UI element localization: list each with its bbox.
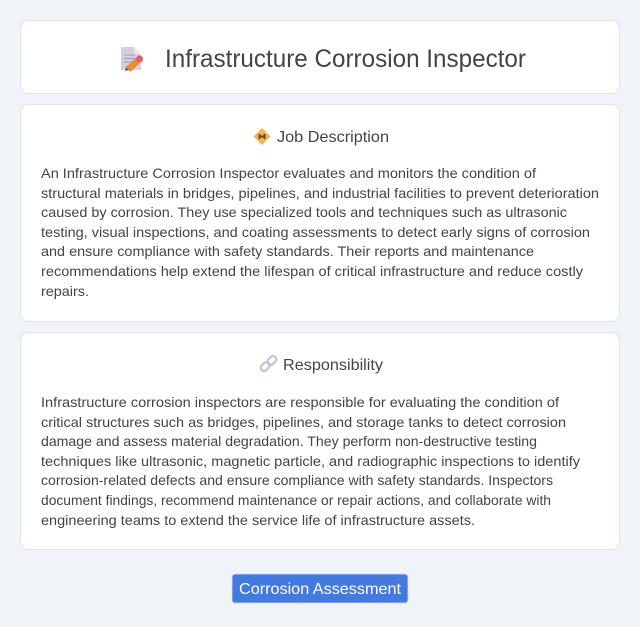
text block: job description: An Infrastructure Corrosion Inspector evaluates and monitors the condition of xyxy=(41,165,536,181)
text block: responsibility: corrosion-related defects and ensure compliance with safety standards. Inspectors xyxy=(41,472,553,488)
text block: responsibility: damage and assess material degradation. They perform non-destructive testing xyxy=(41,433,537,449)
text block: job description: recommendations help extend the lifespan of critical infrastructure and reduce costly xyxy=(41,263,583,279)
panel: title card xyxy=(20,20,620,94)
text block: responsibility xyxy=(41,394,580,528)
text block: responsibility: engineering teams to extend the service life of infrastructure assets. xyxy=(41,512,475,528)
icon: document with pencil xyxy=(121,47,143,71)
title: Infrastructure Corrosion Inspector xyxy=(165,45,526,73)
text block: job description: repairs. xyxy=(41,283,89,299)
text block: responsibility: techniques like ultrasonic, magnetic particle, and radiographic inspections to identify xyxy=(41,453,580,469)
text block: job description: testing, visual inspections, and coating assessments to detect early signs of corrosion xyxy=(41,224,590,240)
button: corrosion assessment: Corrosion Assessment xyxy=(239,581,402,598)
icon: chain link xyxy=(259,355,278,372)
text block: job description xyxy=(41,165,599,299)
heading: job description: Job Description xyxy=(277,129,389,146)
text block: job description: structural materials in bridges, pipelines, and industrial facilities to prevent deterioration xyxy=(41,185,599,201)
text block: responsibility: document findings, recommend maintenance or repair actions, and collaborate with xyxy=(41,492,551,508)
text block: job description: caused by corrosion. They use specialized tools and techniques such as ultrasonic xyxy=(41,204,567,220)
button: corrosion assessment xyxy=(232,574,408,603)
text block: responsibility: Infrastructure corrosion inspectors are responsible for evaluating the condition of xyxy=(41,394,559,410)
text block: responsibility: critical structures such as bridges, pipelines, and storage tanks to detect corrosion xyxy=(41,414,566,430)
heading: responsibility: Responsibility xyxy=(283,357,383,374)
panel: responsibility xyxy=(20,332,620,550)
icon: road sign diamond xyxy=(254,128,270,145)
panel: job description xyxy=(20,104,620,322)
text block: job description: and ensure compliance with safety standards. Their reports and maintenance xyxy=(41,243,534,259)
